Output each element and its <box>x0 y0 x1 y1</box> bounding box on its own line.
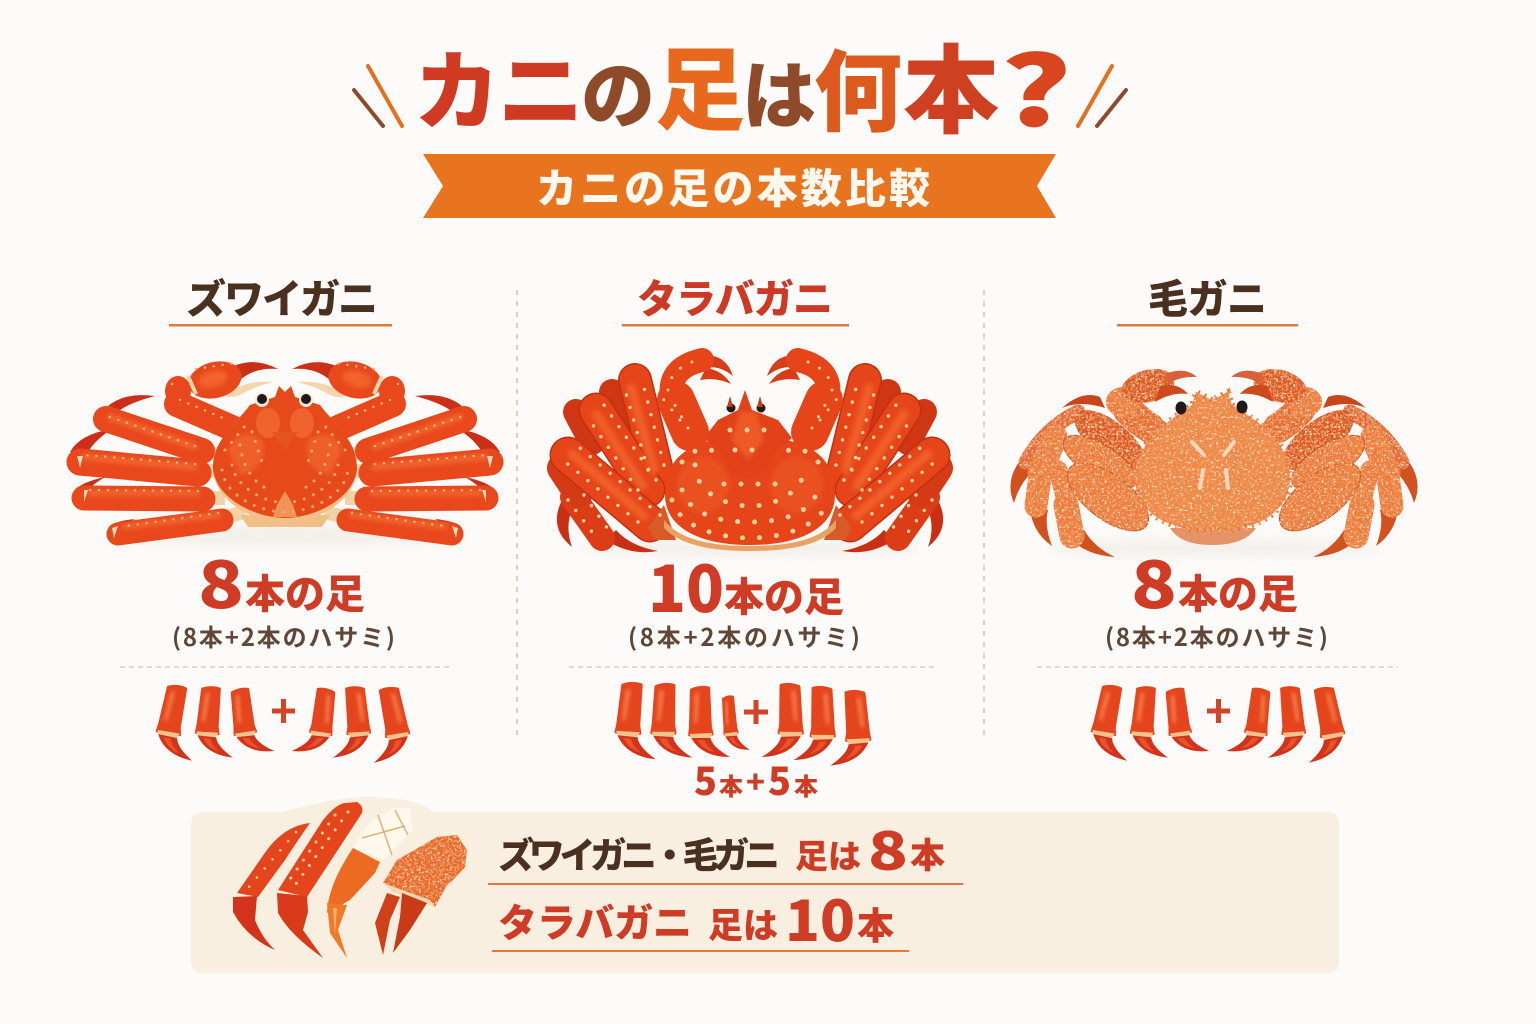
title: ? <box>1000 15 1072 154</box>
heading underline <box>622 324 849 326</box>
summary line 1: 8 <box>868 810 908 885</box>
plus sign <box>272 699 295 723</box>
heading underline <box>1117 324 1298 326</box>
summary line 2: 10 <box>785 877 855 958</box>
count: 5本+5本: 5 <box>768 751 791 806</box>
leg count: 8本の足 <box>198 535 365 627</box>
plus sign <box>1207 699 1230 723</box>
piece 4 <box>383 835 467 907</box>
title: は <box>742 55 816 138</box>
illustration: leg pieces <box>233 802 467 958</box>
panel: 毛ガニ <box>1010 278 1418 763</box>
title: の <box>581 55 655 138</box>
summary line 1: 本 <box>910 837 945 876</box>
piece 2 <box>278 802 362 897</box>
panel: ズワイガニ <box>70 277 500 763</box>
illustration: king crab <box>557 355 943 556</box>
note: 8本+2本のハサミ: (8本+2本のハサミ) <box>172 618 395 653</box>
panel: タラバガニ <box>557 278 943 806</box>
plus sign <box>744 700 768 724</box>
icon row: leg tips <box>153 684 413 763</box>
title <box>414 15 1072 154</box>
title: 何 <box>814 44 902 143</box>
piece 1 <box>237 823 310 897</box>
count: 5本+5本: 本 <box>719 774 743 801</box>
leg count: 8本の足: 8 <box>198 535 244 627</box>
title: 足 <box>655 42 745 142</box>
leg count: 8本の足: 本の足 <box>1178 573 1298 617</box>
leg count: 8本の足: 本の足 <box>245 573 365 617</box>
icon row: leg tips <box>1088 684 1348 763</box>
title: カニ <box>414 45 584 141</box>
summary line 1: 足は <box>795 838 861 875</box>
summary line 1 <box>488 810 963 885</box>
eyes <box>1176 400 1248 414</box>
summary line 2: タラバガニ <box>498 903 692 946</box>
leg count: 8本の足: 8 <box>1131 535 1177 627</box>
leg count: 10本の足: 本の足 <box>724 576 844 620</box>
leg count: 10本の足 <box>648 539 844 631</box>
note: 8本+2本のハサミ: (8本+2本のハサミ) <box>1105 618 1328 653</box>
illustration: snow crab <box>70 356 500 545</box>
divider left <box>516 290 518 737</box>
heading: ズワイガニ: ズワイガニ <box>186 277 378 322</box>
summary line 2: 本 <box>857 906 894 947</box>
leg count: 8本の足 <box>1131 535 1298 627</box>
subtitle ribbon <box>423 154 1056 218</box>
summary line 1: ズワイガニ・毛ガニ <box>498 835 780 876</box>
divider right <box>983 290 985 737</box>
count: 5本+5本 <box>694 751 818 806</box>
note: 8本+2本のハサミ: (8本+2本のハサミ) <box>628 618 860 653</box>
panel: summary <box>191 797 1339 973</box>
piece 3 <box>353 808 413 860</box>
eyes <box>255 393 313 407</box>
count: 5本+5本: 5 <box>694 751 717 806</box>
title: 本 <box>903 39 999 146</box>
heading: タラバガニ: タラバガニ <box>637 278 833 322</box>
summary line 2: 足は <box>708 907 778 946</box>
count: 5本+5本: + <box>746 758 765 802</box>
heading underline <box>169 324 392 326</box>
icon: title emphasis lines right <box>1078 66 1126 126</box>
leg count: 10本の足: 10 <box>648 539 724 631</box>
summary line 2 <box>492 877 909 958</box>
summary background <box>191 797 1339 973</box>
subtitle ribbon: カニの足の本数比較 <box>536 166 930 212</box>
count: 5本+5本: 本 <box>794 774 818 801</box>
icon row: leg tips <box>614 682 872 765</box>
icon: title emphasis lines left <box>354 66 402 126</box>
illustration: hairy crab <box>1010 364 1418 557</box>
heading: 毛ガニ: 毛ガニ <box>1148 278 1267 322</box>
